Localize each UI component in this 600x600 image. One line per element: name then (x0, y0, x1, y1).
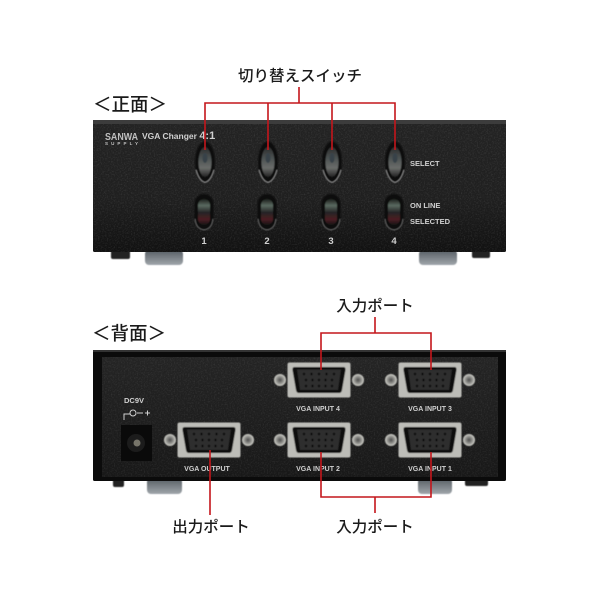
channel numbers (201, 236, 397, 247)
indicator LEDs (194, 194, 404, 230)
port labels: VGA INPUT 3 (408, 406, 452, 413)
device body (93, 350, 506, 481)
panel labels: ON LINE (410, 201, 440, 210)
device body (93, 120, 506, 252)
label: selector switches: 切り替えスイッチ (238, 67, 362, 85)
label: input ports bottom: 入力ポート (336, 518, 414, 536)
heading: rear view: ＜背面＞ (92, 323, 166, 344)
channel numbers: 1 (201, 236, 207, 247)
panel labels: SELECT (410, 159, 440, 168)
channel numbers: 2 (264, 236, 270, 247)
panel labels (410, 159, 451, 226)
connector: input ports top lines (321, 317, 431, 370)
port labels: VGA INPUT 4 (296, 406, 340, 413)
heading: front view: ＜正面＞ (93, 94, 167, 115)
power jack (121, 425, 152, 461)
label: input ports top: 入力ポート (336, 297, 414, 315)
connector: output port line (209, 450, 211, 515)
product name: VGA Changer 4:1 (142, 130, 215, 142)
connector: selector switch lines (205, 87, 395, 150)
port labels (184, 406, 452, 473)
channel numbers: 3 (328, 236, 334, 247)
select buttons (195, 142, 405, 182)
panel: rear of device (93, 350, 506, 494)
port labels: VGA INPUT 2 (296, 466, 340, 473)
channel numbers: 4 (391, 236, 397, 247)
label: output port: 出力ポート (172, 518, 250, 536)
port labels: VGA OUTPUT (184, 466, 231, 473)
VGA ports (164, 362, 475, 458)
panel: front of device (93, 120, 506, 265)
feet (113, 478, 488, 494)
logo: SANWA (105, 131, 138, 143)
power label: DC9V (124, 396, 144, 405)
panel labels: SELECTED (410, 217, 451, 226)
connector: input ports bottom lines (321, 452, 431, 513)
port labels: VGA INPUT 1 (408, 466, 452, 473)
feet (111, 250, 490, 265)
logo: SUPPLY (105, 141, 138, 146)
power label (124, 396, 150, 420)
